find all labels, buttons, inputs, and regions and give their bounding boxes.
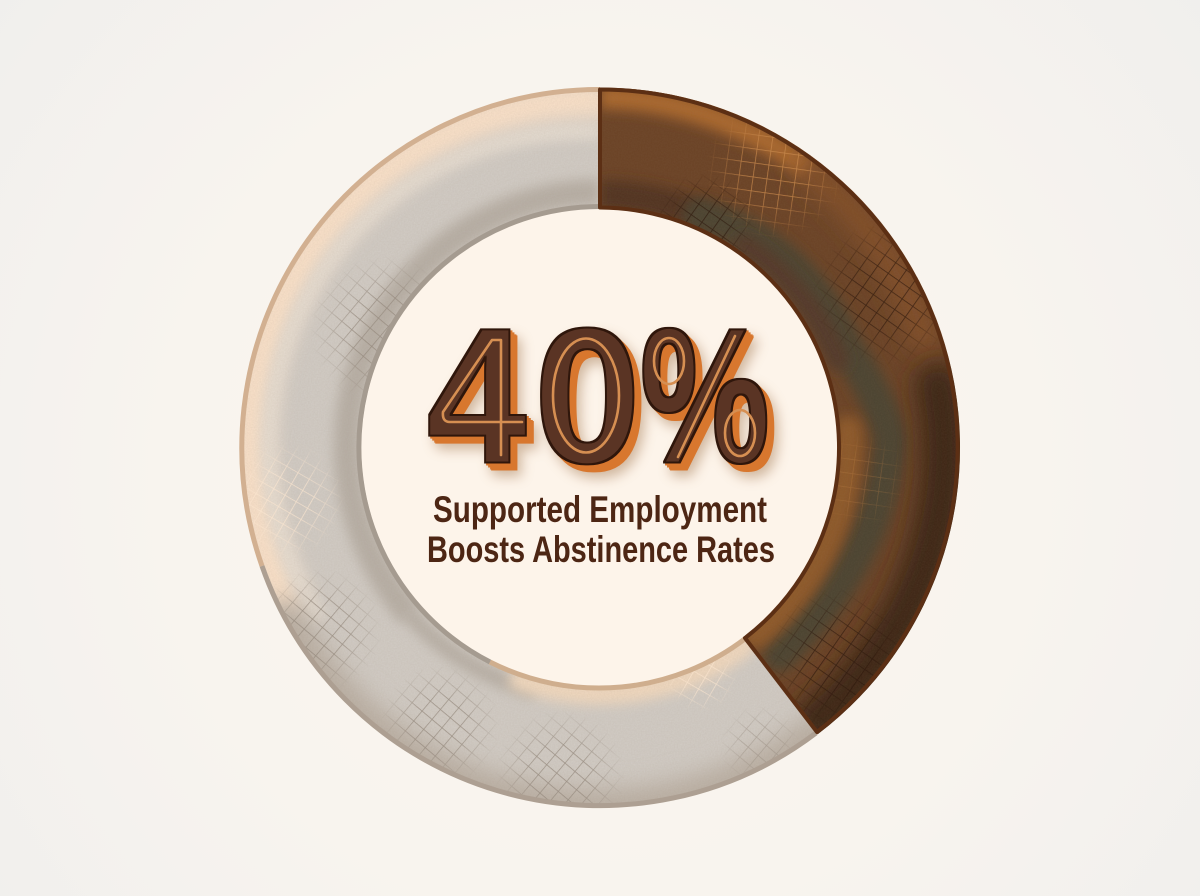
segment: remaining 60% light (230, 80, 830, 820)
big number: 40%: 4 (427, 289, 526, 503)
caption line 2: Boosts Abstinence Rates (427, 529, 775, 570)
big number: 40%: 0 (534, 288, 641, 503)
light segment inner rim (359, 206, 600, 662)
caption line 1: Supported Employment (433, 489, 767, 530)
segment: 40% dark brown (600, 80, 970, 750)
light segment outer rim (242, 89, 600, 566)
brown segment rim (600, 90, 958, 732)
big number: 40%: % (640, 290, 770, 504)
caption (427, 489, 775, 570)
big number: 40% (427, 288, 770, 504)
donut chart (230, 80, 970, 820)
inner circle (358, 206, 842, 690)
